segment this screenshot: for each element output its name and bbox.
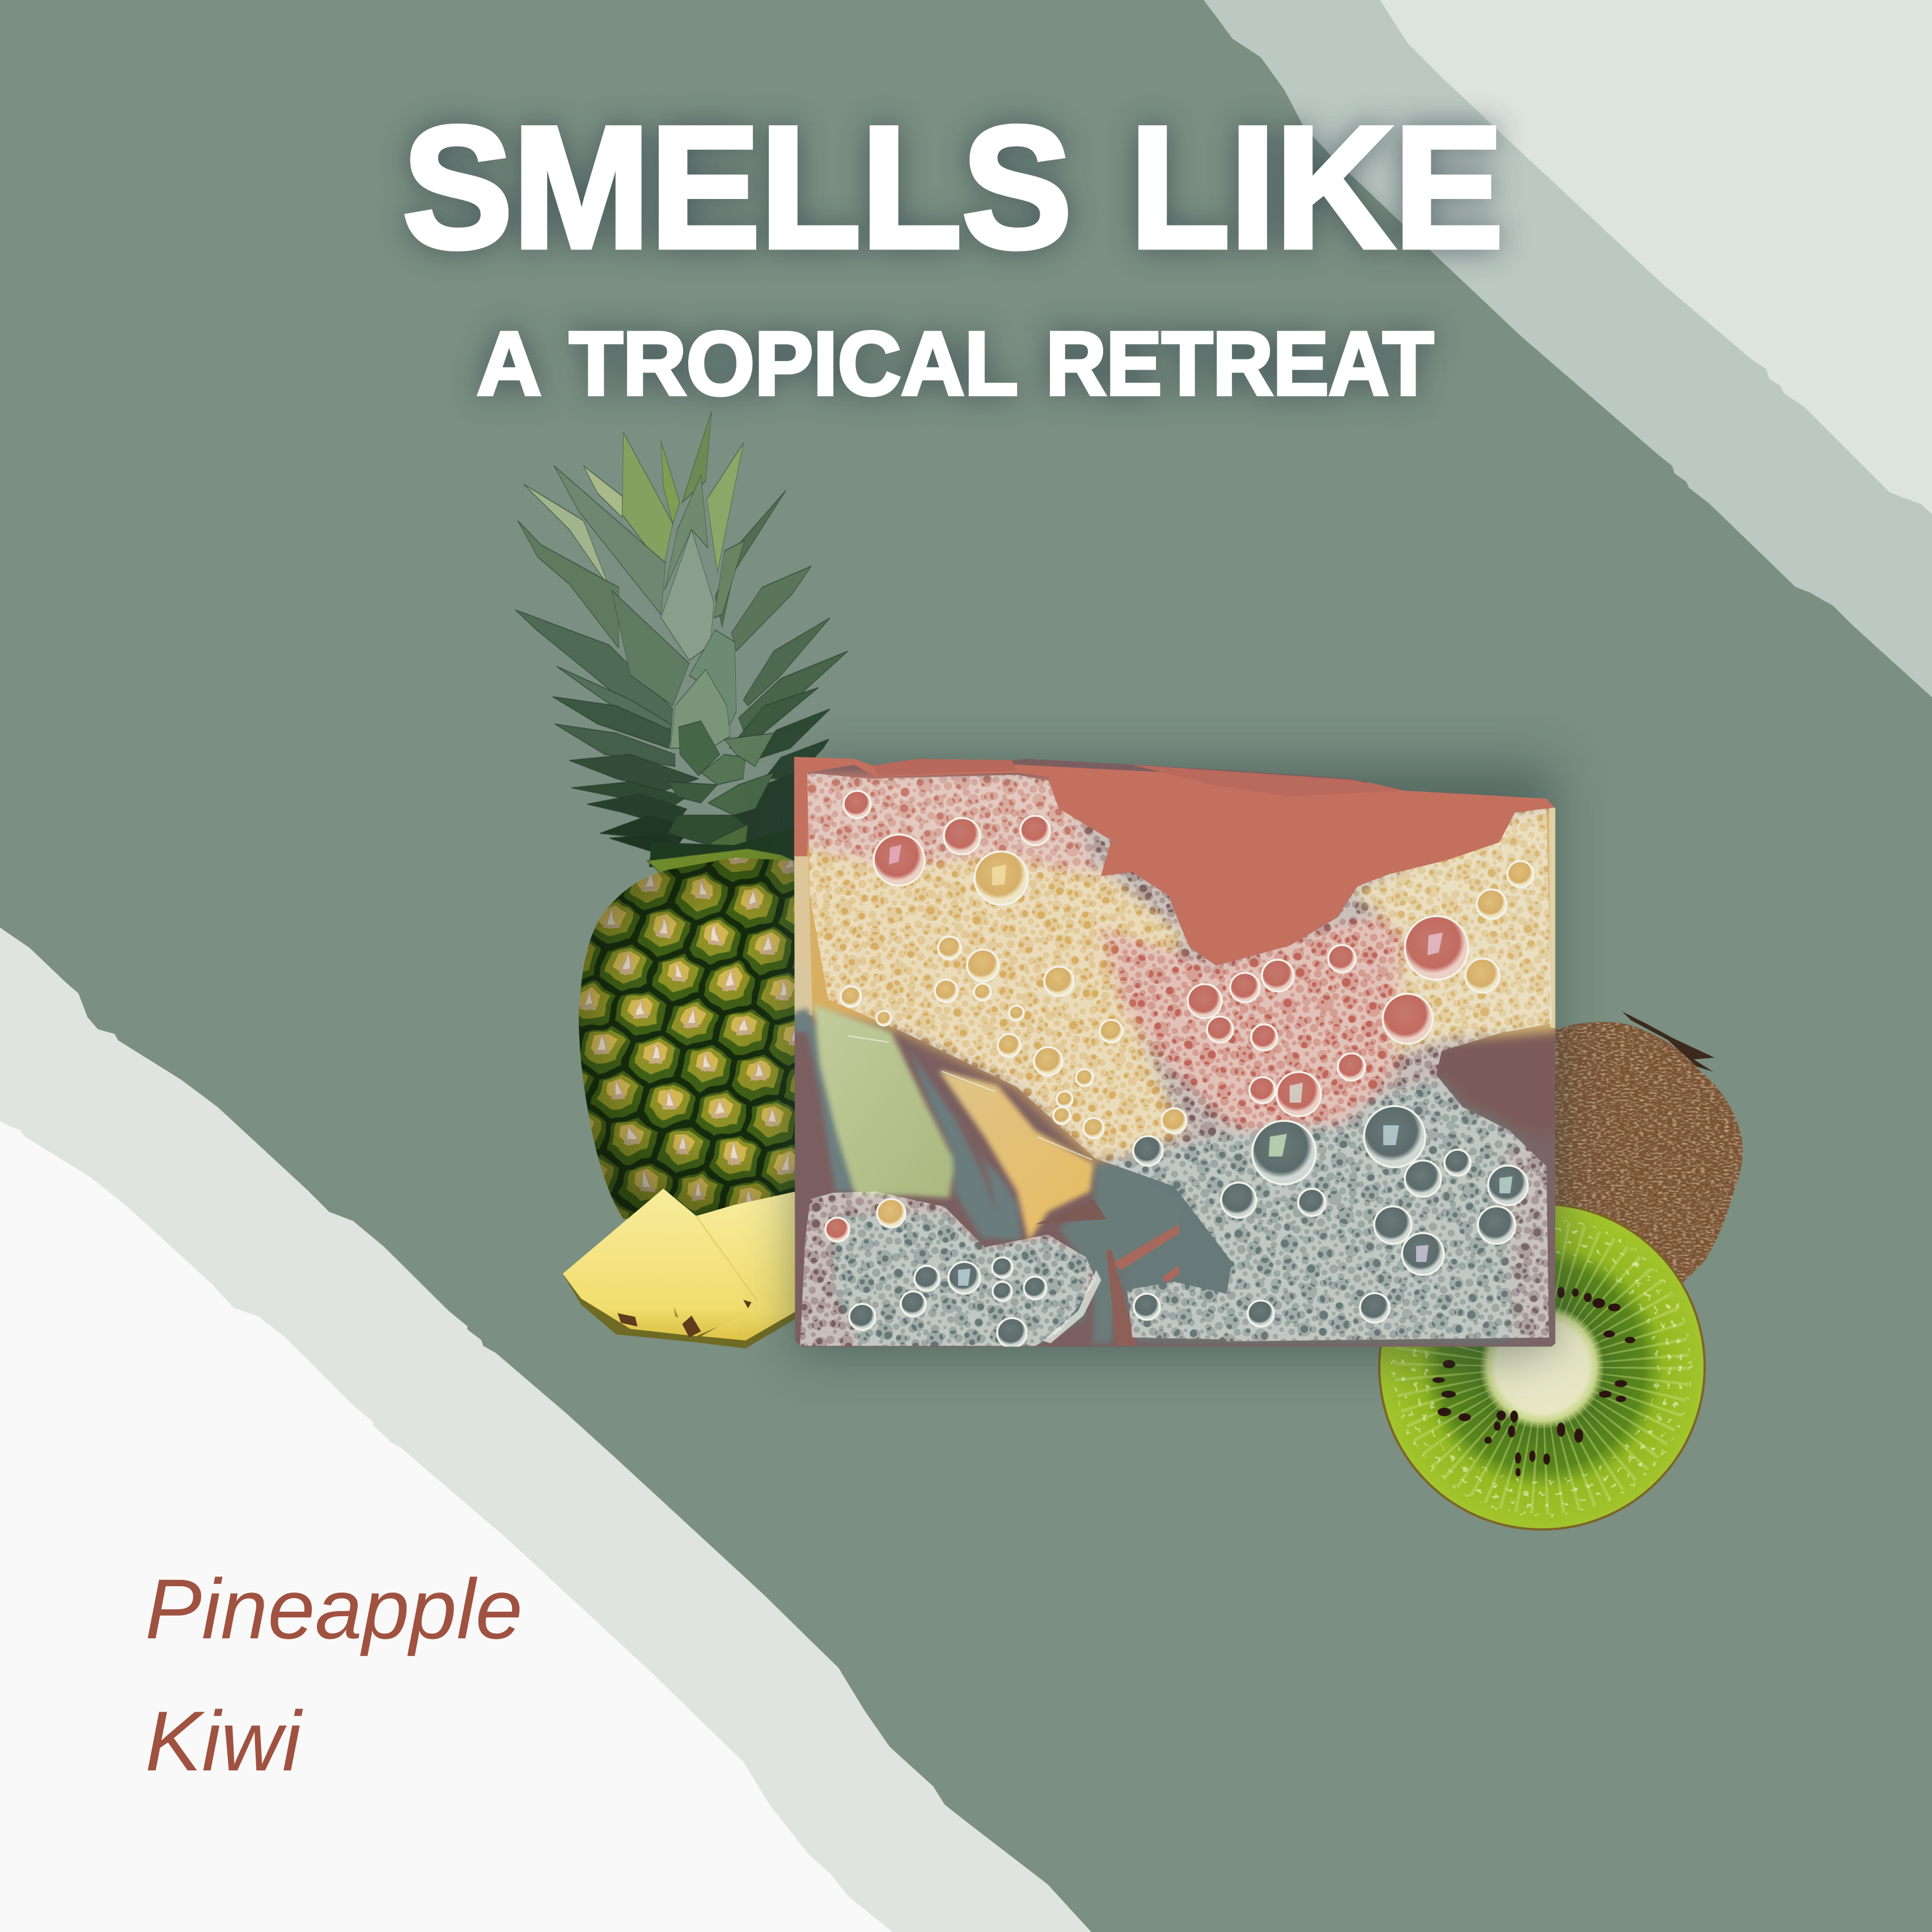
- soap large bubbles: [825, 791, 1533, 1348]
- scent label: Pineapple: Pineapple: [145, 1561, 523, 1656]
- soap orange streak: [939, 1070, 1094, 1241]
- scent label: Kiwi: Kiwi: [145, 1693, 303, 1789]
- soap lower swirls: [793, 964, 1179, 1346]
- pineapple crown leaves: [515, 411, 848, 876]
- title: [402, 90, 1503, 414]
- heading line one: LIKE: [1130, 90, 1503, 284]
- soap terracotta top: [786, 753, 1562, 965]
- torn paper band: top right: [1205, 0, 1932, 696]
- soap foam: [794, 754, 1559, 1349]
- heading line one: [402, 90, 1503, 284]
- pineapple wedges: [563, 1189, 795, 1349]
- heading line two: RETREAT: [1046, 313, 1434, 414]
- kiwi: [1378, 1011, 1743, 1531]
- pineapple: [515, 411, 848, 1349]
- heading line two: A: [477, 313, 541, 414]
- heading line two: TROPICAL: [569, 313, 1018, 414]
- soap upper colours: [786, 753, 1562, 1353]
- title: LIKE: [1130, 90, 1503, 284]
- kiwi slice: [1378, 1203, 1706, 1531]
- torn paper band: bottom left: [0, 929, 1090, 1932]
- kiwi seeds: [1433, 1287, 1635, 1476]
- soap green streak: [814, 1004, 955, 1198]
- title: RETREAT: [1046, 313, 1434, 414]
- pineapple body: [578, 857, 795, 1219]
- title: TROPICAL: [569, 313, 1018, 414]
- heading line one: SMELLS: [402, 90, 1072, 284]
- whole kiwi: [1543, 1011, 1743, 1282]
- title: SMELLS: [402, 90, 1072, 284]
- soap shadow: [794, 765, 1556, 1355]
- soap bubble iridescent glints: [889, 845, 1512, 1286]
- heading line two: [477, 313, 1434, 414]
- title: A: [477, 313, 541, 414]
- soap bar: [786, 753, 1562, 1353]
